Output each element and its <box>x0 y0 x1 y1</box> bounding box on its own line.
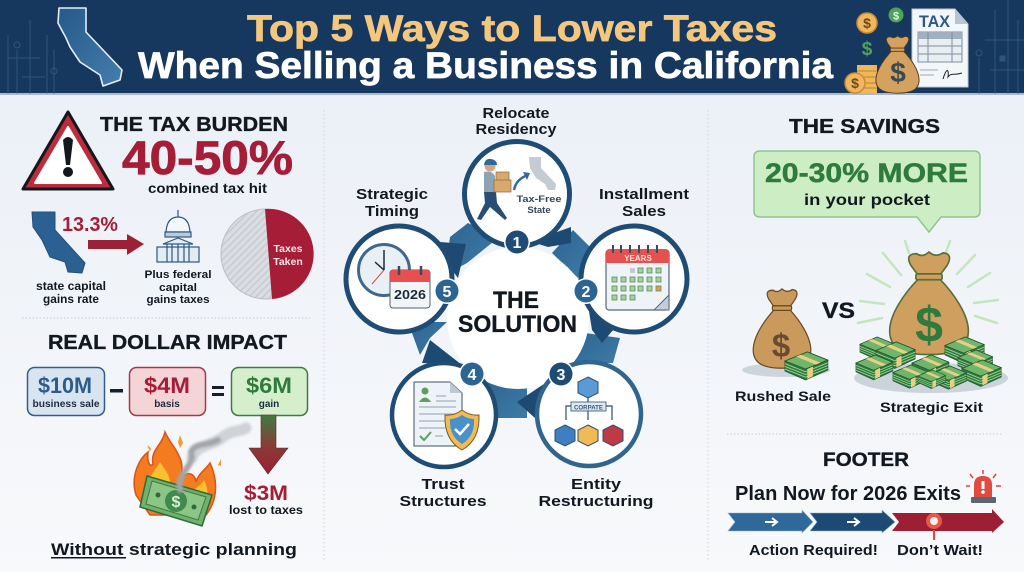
step 5: strategic timing: Timing <box>365 203 419 220</box>
box: $10M business sale <box>28 368 104 416</box>
badge: 2: 2 <box>582 284 591 301</box>
operator: equals <box>212 386 224 396</box>
stat: 13.3%: 13.3% <box>62 214 118 236</box>
pie chart: taxes taken <box>221 209 314 299</box>
title line 1: Top 5 Ways to Lower Taxes <box>247 8 777 49</box>
arrow: step one <box>728 510 813 533</box>
caption: state capital gains rate: state capital <box>36 281 106 293</box>
step 2: installment sales: Installment <box>599 186 689 203</box>
caption: plus federal capital gains taxes: Plus federal <box>144 269 212 281</box>
step 1: relocate residency: Relocate <box>482 105 550 122</box>
caption: plus federal capital gains taxes: gains taxes <box>146 294 210 306</box>
caption: plus federal capital gains taxes: capital <box>159 282 197 294</box>
box: $6M gain: gain <box>259 399 279 410</box>
icon: coins and money bag: $ <box>851 75 859 91</box>
icon: coins and money bag: $ <box>862 39 873 60</box>
arrow: state to federal <box>88 234 144 255</box>
icon: clock and calendar <box>358 244 430 308</box>
icon: coins and money bag: $ <box>863 15 871 31</box>
step 3: entity restructuring <box>537 361 654 510</box>
caption: combined tax hit: combined tax hit <box>148 180 267 196</box>
callout: 20-30% more in your pocket <box>754 151 980 232</box>
icon: large money bag, strategic exit <box>854 241 1008 393</box>
icon: tax document: TAX <box>919 13 950 31</box>
label: entity restructuring <box>538 476 654 510</box>
box: $6M gain <box>232 368 308 416</box>
panel: the savings <box>735 116 1008 415</box>
icon: coins and money bag: $ <box>893 10 899 22</box>
label: rushed sale: Rushed Sale <box>735 388 831 404</box>
caption: state capital gains rate <box>36 281 106 306</box>
center hub: the solution <box>447 247 589 389</box>
icon: California state <box>32 212 85 273</box>
operator: minus <box>110 389 123 392</box>
step 1: relocate residency <box>464 105 570 255</box>
heading: footer: FOOTER <box>823 450 909 471</box>
stat: $3M lost to taxes <box>229 482 303 517</box>
arrows: cycle ring <box>408 223 620 418</box>
box: $4M basis: $4M <box>144 373 190 398</box>
label: trust structures: Structures <box>400 493 486 510</box>
label: vs: VS <box>822 298 855 323</box>
label: entity restructuring: Entity <box>571 476 622 493</box>
callout: 20-30% more in your pocket: 20-30% MORE <box>765 158 968 188</box>
step 2: installment sales: Sales <box>622 203 666 220</box>
panel: the tax burden <box>23 112 314 306</box>
step 5: strategic timing: Strategic <box>356 186 428 203</box>
label: trust structures <box>400 476 486 510</box>
arrow: gain to taxes <box>249 415 288 474</box>
icon: calendar years <box>606 245 669 310</box>
icon: location marker <box>926 513 942 540</box>
icon: coins and money bag <box>845 8 919 93</box>
badge: 4 <box>459 361 485 387</box>
badge: 5 <box>434 278 460 304</box>
box: $10M business sale: $10M <box>38 373 92 398</box>
icon: small money bag, rushed sale <box>742 289 830 380</box>
icon: burning money <box>134 428 246 526</box>
panel: footer <box>728 450 1004 559</box>
arrow: step two <box>810 510 895 533</box>
icon: coins and money bag: $ <box>890 57 906 88</box>
step 4: trust structures <box>392 361 496 510</box>
text: plan now for 2026 exits: Plan Now for 2026 Exits <box>735 483 961 505</box>
panel: real dollar impact <box>28 332 308 559</box>
caption: state capital gains rate: gains rate <box>43 294 99 306</box>
caption: without strategic planning: Without strategic planning <box>51 541 297 559</box>
icon: warning triangle <box>23 112 113 189</box>
icon: corporate structure <box>555 377 623 446</box>
stat: $3M lost to taxes: lost to taxes <box>229 503 303 517</box>
icon: large money bag, strategic exit: $ <box>915 297 943 353</box>
box: $4M basis: basis <box>154 399 180 410</box>
arrow: step three <box>892 509 1004 533</box>
stat: $3M lost to taxes: $3M <box>244 482 288 505</box>
heading: the savings: THE SAVINGS <box>789 116 940 138</box>
label: action required: Action Required! <box>749 542 878 559</box>
icon: capitol building <box>157 210 199 262</box>
title line 2: When Selling a Business in California <box>138 45 833 86</box>
callout: 20-30% more in your pocket: in your pocket <box>804 192 931 209</box>
icon: mover carrying boxes: Tax-Free <box>516 194 562 205</box>
icon: mover carrying boxes: State <box>527 205 551 216</box>
icon: California outline <box>58 8 122 86</box>
label: trust structures: Trust <box>422 476 464 493</box>
icon: calendar years: YEARS <box>624 254 652 263</box>
icon: tax document <box>912 9 968 87</box>
pie chart: taxes taken: Taken <box>273 256 303 268</box>
label: don't wait: Don’t Wait! <box>897 542 983 559</box>
step 1: relocate residency: Residency <box>476 121 557 138</box>
badge: 3 <box>548 361 574 387</box>
icon: mover carrying boxes <box>477 157 562 220</box>
badge: 5: 5 <box>443 284 452 301</box>
pie chart: taxes taken: Taxes <box>274 243 303 255</box>
heading: real dollar impact: REAL DOLLAR IMPACT <box>48 332 287 354</box>
icon: siren <box>966 470 1001 503</box>
caption: plus federal capital gains taxes <box>144 269 212 306</box>
badge: 1: 1 <box>513 235 522 252</box>
box: $6M gain: $6M <box>246 373 292 398</box>
header circuit pattern right <box>976 0 1024 94</box>
center hub: the solution: THE <box>493 287 539 314</box>
stat: 40-50%: 40-50% <box>122 131 293 184</box>
header circuit pattern left <box>8 20 57 94</box>
step 5: strategic timing <box>346 186 460 332</box>
box: $10M business sale: business sale <box>32 399 100 410</box>
header band <box>0 0 1024 95</box>
badge: 2 <box>573 278 599 304</box>
panel: the solution cycle <box>346 105 689 510</box>
icon: clock and calendar: 2026 <box>394 287 426 302</box>
step 2: installment sales <box>573 186 689 332</box>
icon: corporate structure: CORPATE <box>574 404 604 412</box>
badge: 3: 3 <box>557 367 566 384</box>
icon: trust document and shield <box>414 382 479 450</box>
label: strategic exit: Strategic Exit <box>880 399 983 415</box>
box: $4M basis <box>130 368 206 416</box>
heading: the tax burden: THE TAX BURDEN <box>100 114 288 136</box>
icon: small money bag, rushed sale: $ <box>772 327 790 364</box>
badge: 1 <box>504 229 530 255</box>
icon: burning money: $ <box>172 494 181 511</box>
center hub: the solution: SOLUTION <box>458 311 577 338</box>
badge: 4: 4 <box>468 367 477 384</box>
label: entity restructuring: Restructuring <box>538 493 654 510</box>
